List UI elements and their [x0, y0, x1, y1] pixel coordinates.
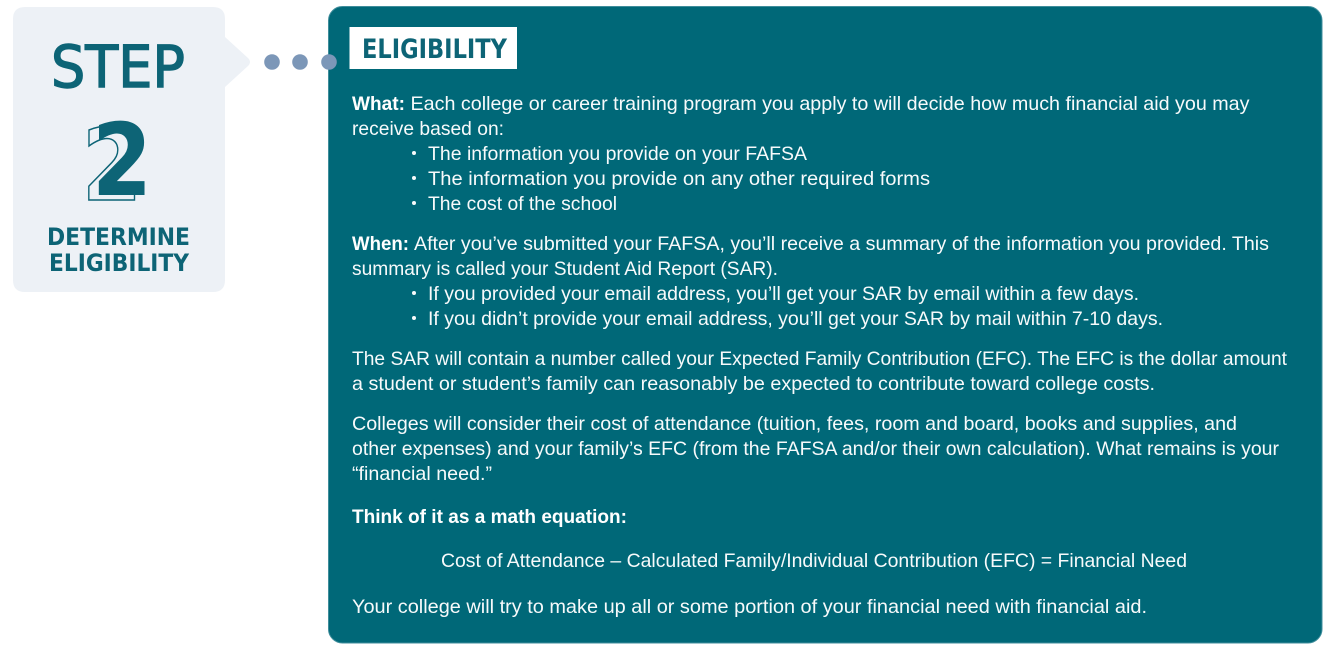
text block: when: After you’ve submitted your FAFSA, you’ll receive a summary of the information you provided. This — [414, 233, 1269, 255]
text block: what — [352, 93, 1250, 215]
text block: when: summary is called your Student Aid Report (SAR). — [352, 258, 778, 280]
heading: eligibility: ELIGIBILITY — [362, 34, 507, 65]
text block: what: The cost of the school — [428, 193, 617, 215]
heading: STEP: STEP — [51, 33, 185, 101]
label: determine eligibility: DETERMINE — [47, 223, 190, 251]
panel background — [328, 6, 1322, 643]
text block: what: Each college or career training program you apply to will decide how much financial aid you may — [410, 93, 1250, 115]
text block: what: receive based on: — [352, 118, 504, 140]
numeral 2: 2 — [92, 102, 152, 219]
connector dots — [264, 54, 337, 70]
text block: SAR explanation: The SAR will contain a number called your Expected Family Contribution (EFC). The EFC is the dollar amount — [352, 348, 1288, 370]
heading: eligibility — [350, 27, 517, 69]
text block: when — [352, 233, 1269, 330]
label: determine eligibility — [47, 223, 190, 277]
text block: financial need: other expenses) and your family’s EFC (from the FAFSA and/or their own calculation). What remains is your — [352, 438, 1279, 460]
numeral 2: 2 — [82, 107, 142, 224]
subheading: math equation: Think of it as a math equation: — [352, 506, 627, 528]
text block: when: When: — [352, 233, 409, 255]
card background with pointer — [13, 7, 250, 292]
panel: step card — [13, 7, 250, 292]
text block: what: The information you provide on any other required forms — [428, 168, 930, 190]
equation: Cost of Attendance – Calculated Family/Individual Contribution (EFC) = Financial Need — [441, 550, 1187, 572]
text block: what: The information you provide on your FAFSA — [428, 143, 807, 165]
text block: when: If you didn’t provide your email address, you’ll get your SAR by mail within 7-10 days. — [428, 308, 1163, 330]
text block: financial need: Colleges will consider their cost of attendance (tuition, fees, room and board, books and supplies, and — [352, 413, 1237, 435]
text block: SAR explanation: a student or student’s family can reasonably be expected to contribute toward college costs. — [352, 373, 1155, 395]
text block: SAR explanation — [352, 348, 1288, 395]
text block: what: What: — [352, 93, 405, 115]
text block: financial need: “financial need.” — [352, 463, 492, 485]
panel: eligibility details — [264, 6, 1322, 643]
closing text: Your college will try to make up all or some portion of your financial need with financial aid. — [352, 596, 1147, 618]
label: determine eligibility: ELIGIBILITY — [49, 249, 190, 277]
text block: financial need — [352, 413, 1279, 485]
text block: when: If you provided your email address, you’ll get your SAR by email within a few days. — [428, 283, 1139, 305]
